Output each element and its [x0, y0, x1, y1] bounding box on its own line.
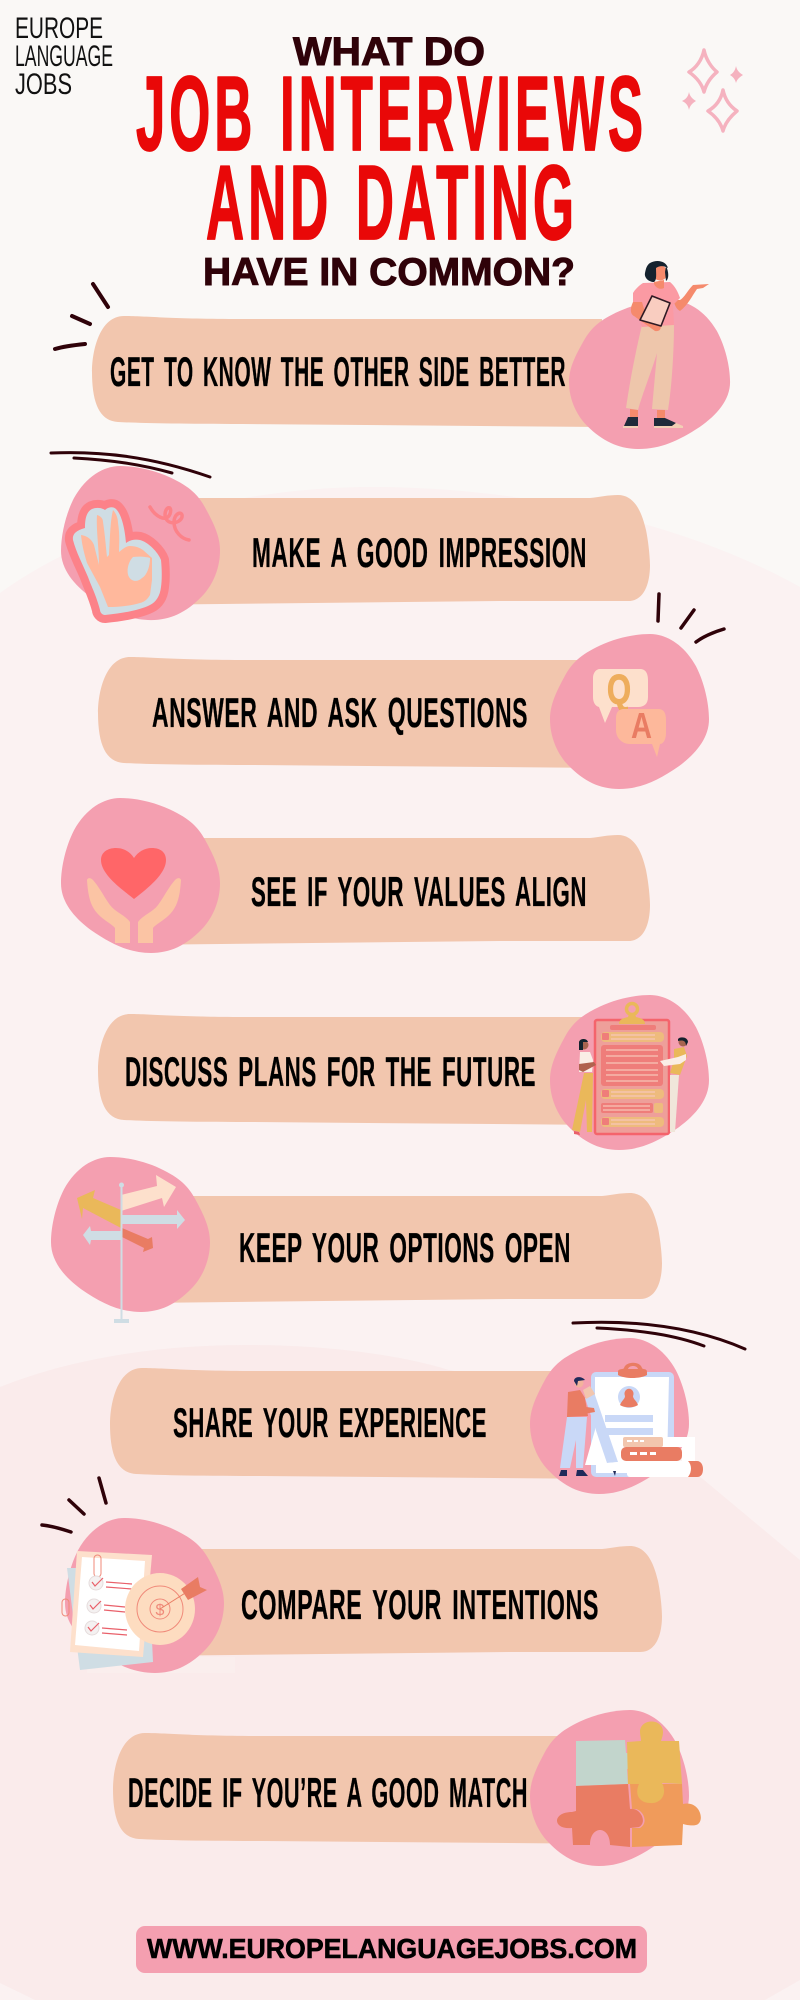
accent strokes: step 2 [51, 453, 210, 477]
icon: heart in hands [87, 848, 181, 943]
blob [530, 1338, 689, 1494]
accent strokes: step 3 [658, 594, 724, 642]
icon: ok hand [73, 507, 189, 615]
footer: website button: WWW.EUROPELANGUAGEJOBS.COM [147, 1933, 637, 1964]
panel: step 9 decide if good match [113, 1710, 701, 1866]
panel: step 8 compare your intentions [62, 1518, 662, 1673]
logo: Europe Language Jobs: JOBS [15, 68, 72, 101]
title line: what do: WHAT DO [293, 30, 485, 74]
blob [61, 798, 220, 953]
icon: resume with person and books [559, 1363, 703, 1477]
icon: signpost [77, 1175, 185, 1323]
title [136, 30, 647, 294]
panel: step 1 get to know [92, 261, 730, 449]
icon: checklist with two people [572, 1004, 688, 1135]
accent strokes: step 1 [55, 284, 108, 349]
faint smear [87, 1657, 235, 1673]
accent strokes: step 7 [573, 1322, 745, 1349]
icon: question and answer bubbles: A [631, 705, 652, 746]
blob [530, 1710, 689, 1866]
icon: checklist and target: $ [156, 1602, 165, 1619]
panel: step 5 discuss plans [98, 995, 709, 1150]
blob [550, 995, 709, 1150]
pill [113, 1733, 623, 1844]
icon: question and answer bubbles [593, 666, 666, 757]
pill [142, 1193, 662, 1303]
panel: step 6 keep your options open [51, 1157, 662, 1323]
title line: have in common: HAVE IN COMMON? [203, 251, 575, 294]
panel: step 4 see if your values align [61, 798, 650, 953]
blob [65, 1518, 224, 1673]
icon: sparkles [682, 50, 743, 131]
step text: SHARE YOUR EXPERIENCE [173, 1399, 487, 1446]
panel: step 7 share your experience [110, 1338, 703, 1494]
blob [51, 1157, 210, 1312]
logo: Europe Language Jobs [15, 12, 113, 101]
icon: puzzle pieces [557, 1722, 701, 1847]
pill [130, 495, 650, 605]
logo: Europe Language Jobs: EUROPE [15, 12, 103, 45]
icon: checklist and target [62, 1551, 207, 1670]
icon: question and answer bubbles: Q [607, 666, 631, 713]
pill [98, 657, 608, 768]
pill [130, 835, 650, 945]
footer: website button [136, 1926, 647, 1973]
panel: step 2 make a good impression [61, 466, 650, 620]
logo: Europe Language Jobs: LANGUAGE [15, 40, 113, 73]
panel: step 3 answer and ask questions [98, 634, 709, 789]
pill [142, 1546, 662, 1656]
pill [92, 316, 602, 427]
icon: woman with tablet [623, 261, 709, 428]
pill [110, 1368, 620, 1479]
blob [569, 300, 730, 449]
pill [98, 1014, 608, 1125]
blob [550, 634, 709, 789]
accent strokes: step 8 [42, 1478, 106, 1532]
blob [61, 466, 220, 620]
